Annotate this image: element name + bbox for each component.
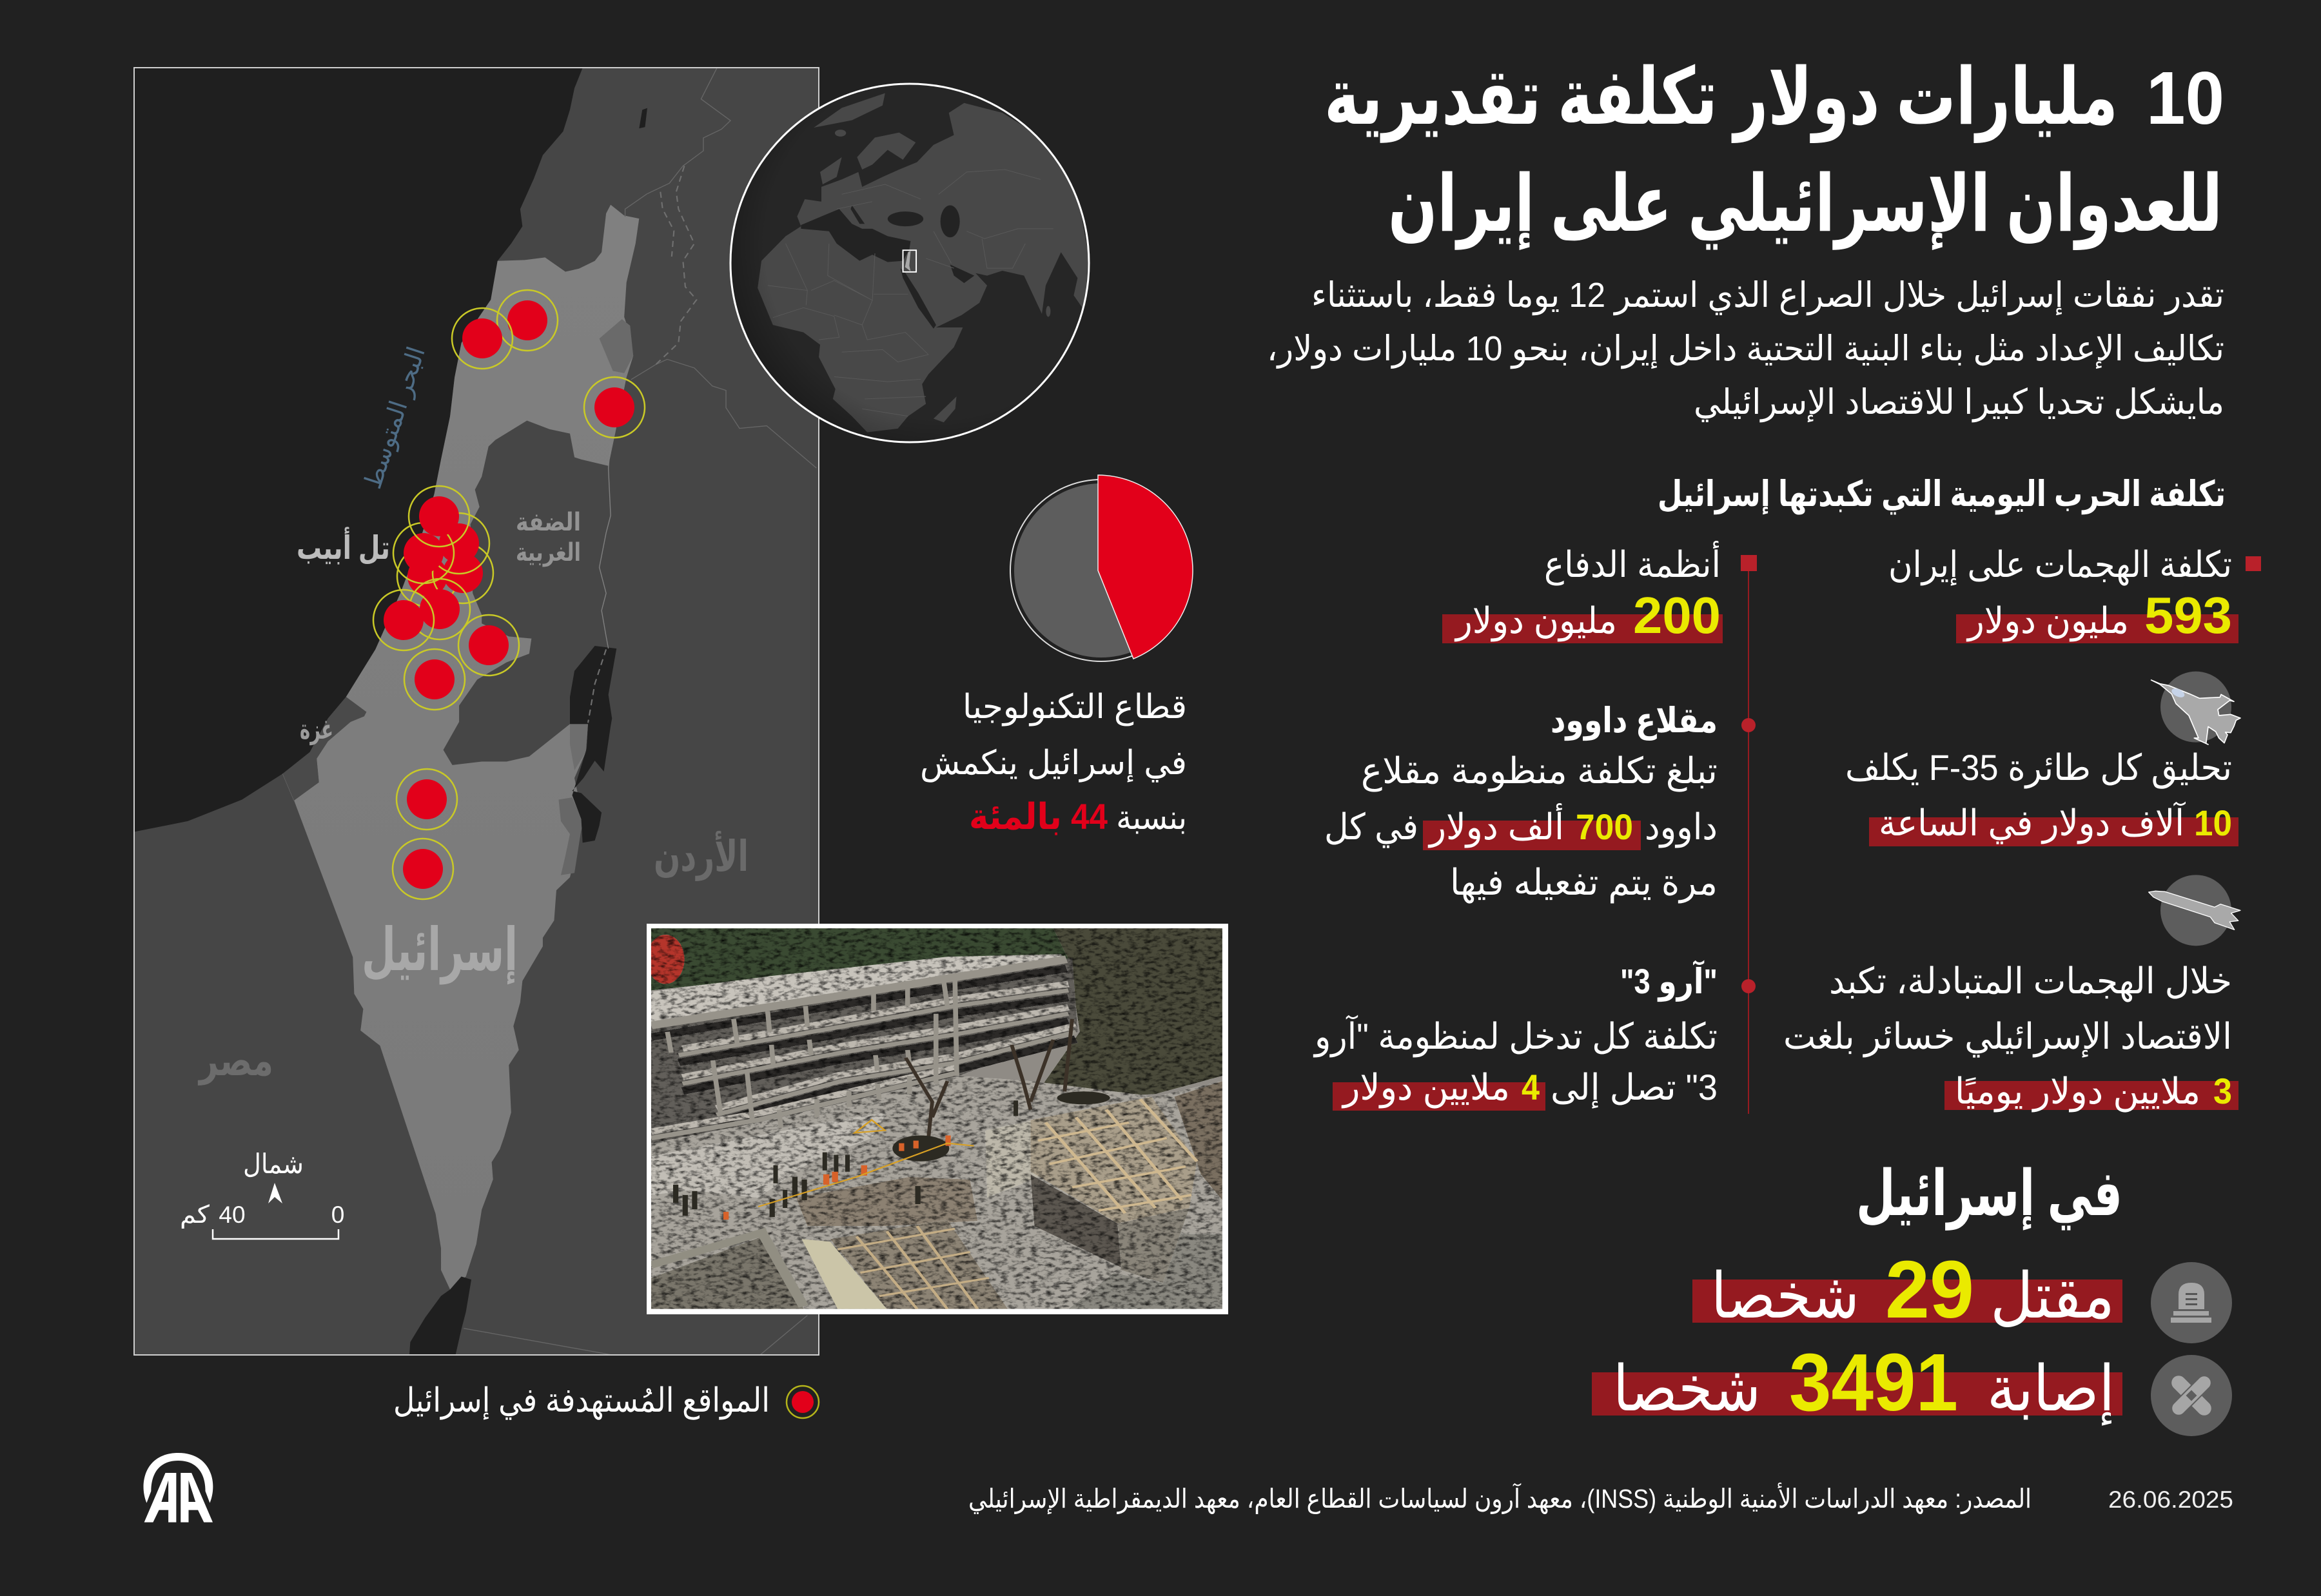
economic losses text: 3 (2213, 1071, 2232, 1111)
map label: West Bank (516, 509, 581, 567)
economic losses text: ملايين دولار يوميًا (1955, 1071, 2200, 1113)
David's Sling text: 700 (1576, 806, 1633, 847)
killed row (1692, 1244, 2122, 1335)
map panel (133, 68, 819, 1355)
left column: defense systems: 200 (1633, 587, 1721, 644)
left column: defense systems: مليون دولار (1454, 600, 1617, 642)
David's Sling text: مرة يتم تفعيله فيها (1450, 862, 1718, 904)
right column: cost of attacks on Iran (1888, 544, 2261, 644)
Arrow 3 text: تكلفة كل تدخل لمنظومة "آرو (1313, 1015, 1718, 1058)
F-35 flight cost text: آلاف دولار في الساعة (1879, 801, 2186, 844)
injured row: 3491 (1789, 1337, 1958, 1428)
economic losses text (1783, 960, 2238, 1113)
icon: missile (2149, 875, 2240, 946)
economic losses text: الاقتصاد الإسرائيلي خسائر بلغت (1783, 1016, 2232, 1058)
intro paragraph (1267, 276, 2224, 422)
north arrow and scale bar: شمال (243, 1149, 304, 1179)
pie caption: بنسبة 44 بالمئة (969, 796, 1187, 837)
map label: Jordan: الأردن (654, 830, 749, 881)
photo: destroyed building (647, 924, 1228, 1314)
north arrow and scale bar (180, 1149, 344, 1239)
David's Sling text: تبلغ تكلفة منظومة مقلاع (1361, 750, 1718, 792)
injured row (1592, 1337, 2122, 1428)
killed row: مقتل (1990, 1260, 2115, 1331)
intro paragraph: مايشكل تحديا كبيرا للاقتصاد الإسرائيلي (1694, 383, 2224, 422)
Arrow 3 text: ملايين دولار (1341, 1067, 1510, 1109)
intro paragraph: تكاليف الإعداد مثل بناء البنية التحتية داخل إيران، بنحو 10 مليارات دولار، (1267, 329, 2224, 369)
map label: Israel: إسرائيل (362, 917, 518, 985)
left column: defense systems (1442, 541, 1723, 644)
map label: Egypt: مصر (198, 1036, 273, 1085)
Arrow 3 text: 4 (1522, 1067, 1540, 1107)
David's Sling text: ألف دولار (1427, 803, 1564, 848)
heading: in Israel: في إسرائيل (1856, 1158, 2122, 1231)
date: 26.06.2025 (2108, 1486, 2233, 1513)
injured row: إصابة (1987, 1353, 2115, 1426)
north arrow and scale bar: 0 (331, 1202, 344, 1228)
AA logo (144, 1453, 213, 1523)
source line: المصدر: معهد الدراسات الأمنية الوطنية (INSS)، معهد آرون لسياسات القطاع العام، معهد الديمقراطية الإسرائيلي (968, 1482, 2032, 1515)
icon: F-35 jet (2151, 672, 2240, 744)
F-35 flight cost text (1845, 747, 2238, 846)
north arrow and scale bar: كم (180, 1202, 210, 1229)
map frame (134, 68, 819, 1355)
map label: Tel Aviv: تل أبيب (297, 527, 390, 566)
right column: cost of attacks on Iran: مليون دولار (1966, 600, 2129, 642)
Arrow 3 text: "آرو 3" (1620, 960, 1718, 1002)
David's Sling text: داوود (1645, 806, 1718, 848)
map label: Gaza: غزة (300, 714, 333, 746)
icon: bandage (2151, 1355, 2232, 1436)
right column: cost of attacks on Iran: تكلفة الهجمات على إيران (1888, 544, 2232, 587)
title (1324, 53, 2224, 250)
map label: West Bank: الغربية (516, 539, 581, 567)
map label: West Bank: الضفة (516, 509, 581, 536)
David's Sling text: في كل (1324, 806, 1418, 848)
right column: cost of attacks on Iran: 593 (2144, 587, 2232, 644)
pie caption (920, 688, 1187, 837)
globe locator (730, 84, 1089, 442)
F-35 flight cost text: 10 (2194, 803, 2232, 843)
map label: Mediterranean Sea: البحر المتوسط (359, 344, 431, 492)
pie caption: في إسرائيل ينكمش (920, 744, 1187, 783)
intro paragraph: تقدر نفقات إسرائيل خلال الصراع الذي استمر 12 يوما فقط، باستثناء (1311, 276, 2224, 315)
Arrow 3 text: 3" تصل إلى (1551, 1067, 1718, 1109)
pie caption: قطاع التكنولوجيا (963, 688, 1187, 726)
center divider with markers (1741, 555, 1757, 1114)
left column: defense systems: أنظمة الدفاع (1544, 541, 1721, 586)
Arrow 3 text (1313, 960, 1718, 1111)
pie chart: tech sector shrink 44% (1010, 475, 1193, 661)
injured row: شخصا (1613, 1353, 1761, 1424)
killed row: 29 (1885, 1244, 1974, 1335)
title: 10 (2146, 56, 2224, 140)
David's Sling text (1324, 701, 1718, 904)
targeted site markers (373, 290, 645, 899)
icon: tombstone (2151, 1262, 2232, 1343)
F-35 flight cost text: تحليق كل طائرة F-35 يكلف (1845, 747, 2232, 789)
economic losses text: خلال الهجمات المتبادلة، تكبد (1829, 960, 2232, 1002)
map legend: المواقع المُستهدفة في إسرائيل (393, 1382, 770, 1420)
killed row: شخصا (1711, 1260, 1859, 1331)
north arrow and scale bar: 40 (219, 1202, 246, 1228)
David's Sling text: مقلاع داوود (1551, 701, 1718, 741)
